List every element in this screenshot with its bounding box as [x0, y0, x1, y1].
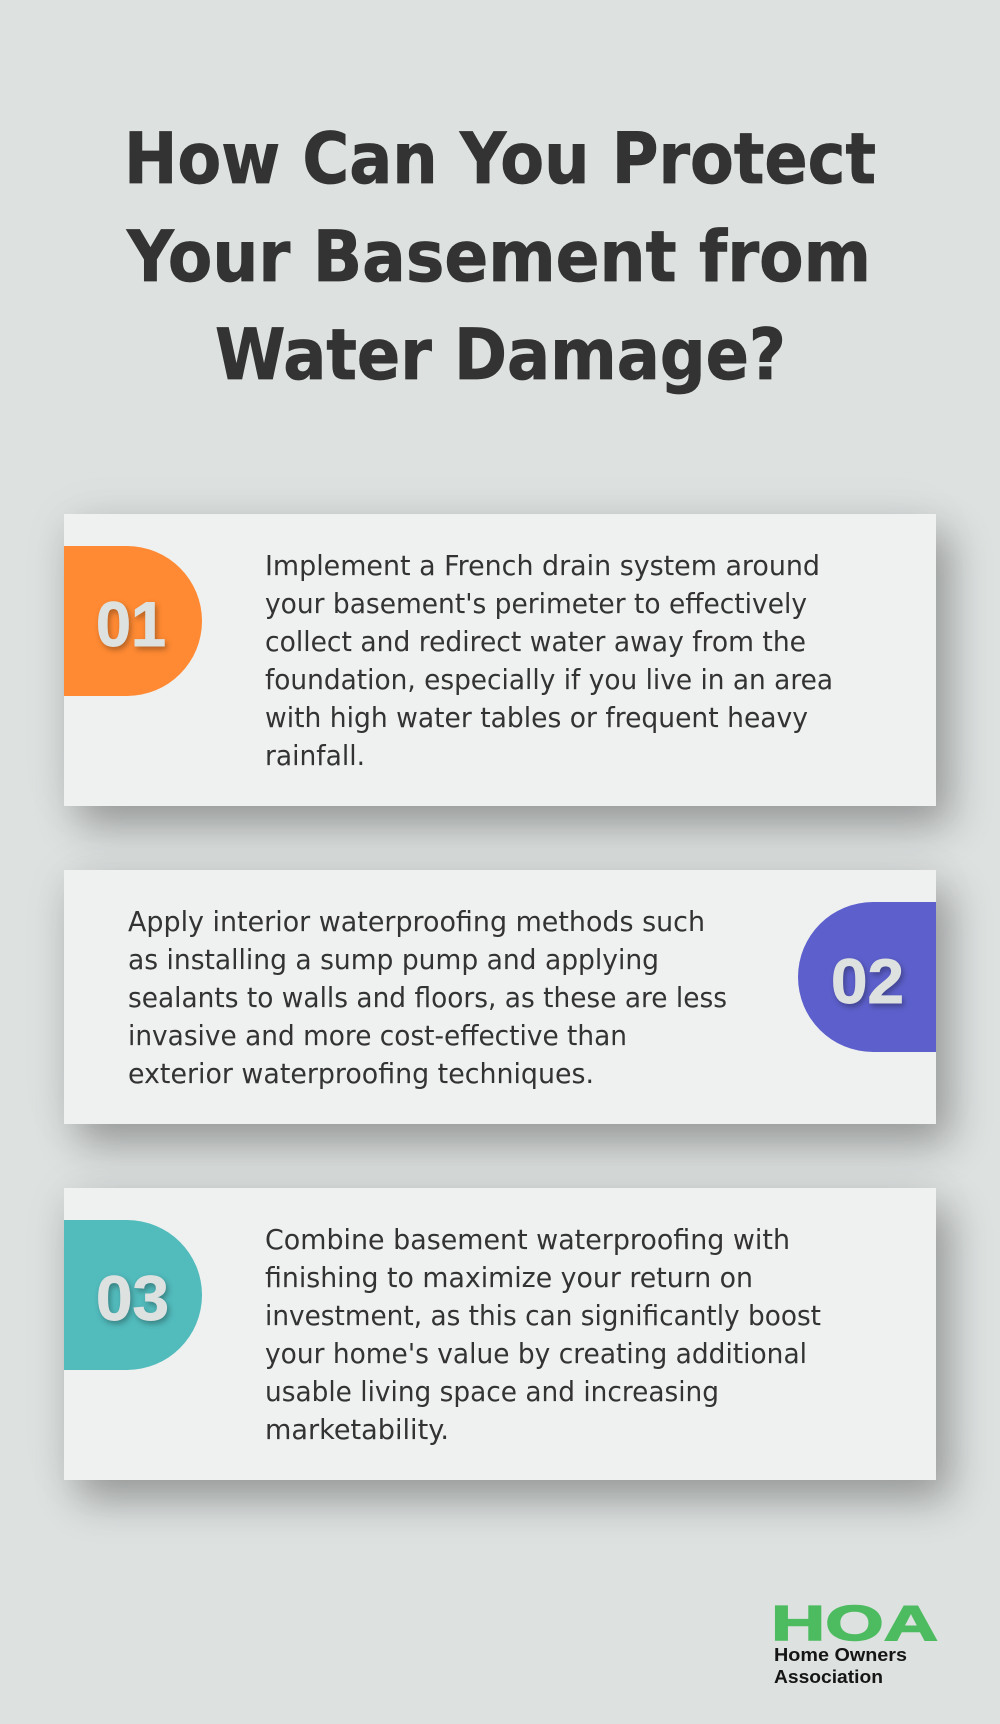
text: step 02 description: exterior waterproofing techniques.	[128, 1058, 594, 1090]
text: step 02 description: as installing a sump pump and applying	[128, 944, 659, 976]
badge: 03: 03	[96, 1264, 169, 1334]
text: step 02 description	[128, 906, 727, 1090]
logo: HOA Home Owners Association: Home Owners	[774, 1645, 907, 1665]
text: step 01 description: Implement a French drain system around	[265, 550, 820, 582]
text: step 03 description	[265, 1224, 821, 1446]
badge: 01: 01	[96, 590, 166, 660]
text: step 03 description: Combine basement waterproofing with	[265, 1224, 790, 1256]
badge: 02: 02	[831, 947, 904, 1017]
text: step 01 description	[265, 550, 833, 772]
logo: HOA Home Owners Association: HOA	[771, 1597, 938, 1651]
badge: 03	[64, 1220, 202, 1370]
text: step 01 description: rainfall.	[265, 740, 365, 772]
text: step 03 description: your home's value by creating additional	[265, 1338, 807, 1370]
text: step 01 description: with high water tables or frequent heavy	[265, 702, 808, 734]
text: step 03 description: investment, as this can significantly boost	[265, 1300, 821, 1332]
text: step 02 description: invasive and more cost-effective than	[128, 1020, 627, 1052]
text: step 03 description: finishing to maximize your return on	[265, 1262, 753, 1294]
panel: step 02 interior waterproofing	[64, 870, 936, 1124]
text: step 02 description: sealants to walls and floors, as these are less	[128, 982, 727, 1014]
text: step 01 description: collect and redirect water away from the	[265, 626, 806, 658]
text: step 01 description: your basement's perimeter to effectively	[265, 588, 807, 620]
text: step 03 description: marketability.	[265, 1414, 449, 1446]
logo: HOA Home Owners Association: Association	[774, 1667, 883, 1687]
text: step 02 description: Apply interior waterproofing methods such	[128, 906, 705, 938]
title: Your Basement from	[126, 216, 871, 298]
logo: HOA Home Owners Association	[771, 1597, 938, 1687]
title: Water Damage?	[215, 314, 786, 396]
text: step 03 description: usable living space and increasing	[265, 1376, 719, 1408]
badge: 02	[798, 902, 936, 1052]
text: step 01 description: foundation, especially if you live in an area	[265, 664, 833, 696]
badge: 01	[64, 546, 202, 696]
panel: step 01 French drain	[64, 514, 936, 806]
title: How Can You Protect	[124, 118, 876, 200]
panel: step 03 finishing	[64, 1188, 936, 1480]
title	[124, 118, 876, 396]
